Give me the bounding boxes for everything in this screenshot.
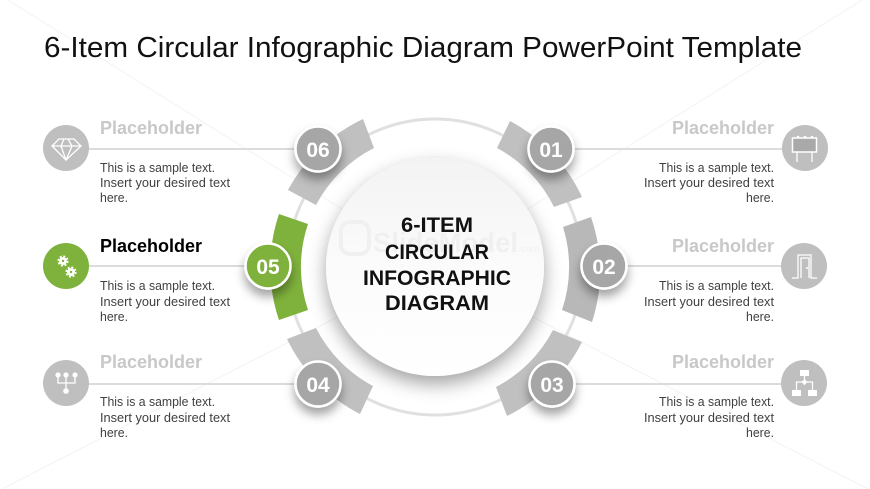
badge 01 [528,126,574,172]
icon: flow chart [781,360,827,406]
text block 06 [100,118,230,205]
badge 04: 04 [306,374,330,397]
text block 04: Insert your desired text [100,410,230,425]
text block 02 [644,236,774,324]
segment 04 [287,328,373,414]
badge 02 [582,244,626,288]
badge 02: 02 [592,256,616,279]
icon: door [781,243,827,289]
text block 03: Insert your desired text [644,410,774,425]
text block 04 [100,352,230,440]
badge 05: 05 [256,256,280,279]
text block 02: Insert your desired text [644,294,774,309]
centre text [363,214,511,315]
text block 03: This is a sample text. [659,394,774,409]
text block 02: This is a sample text. [659,278,774,293]
centre text: CIRCULAR [385,241,489,264]
badge 06 [296,126,340,172]
segment 01 [497,121,582,207]
text block 01: This is a sample text. [659,160,774,175]
title: 6-Item Circular Infographic Diagram PowerPoint Template [44,32,802,64]
text block 03: Placeholder [672,352,774,372]
text block 05: This is a sample text. [100,278,215,293]
badge 05 [246,244,290,288]
segment 03 [496,330,582,416]
badge 04 [296,362,340,406]
watermark: SlideModel [373,227,518,258]
watermark: .com [518,244,540,255]
icon: hierarchy [43,360,89,406]
text block 04: here. [100,425,128,440]
icon: diamond [43,125,89,171]
text block 04: Placeholder [100,352,202,372]
text block 06: here. [100,190,128,205]
segment 02 [562,217,600,322]
icon: gears [43,243,89,289]
text block 06: Insert your desired text [100,175,230,190]
centre text: INFOGRAPHIC [363,267,511,290]
centre text: DIAGRAM [385,292,489,315]
centre text: 6-ITEM [401,214,473,237]
badge 03 [530,362,574,406]
text block 05 [100,236,230,324]
text block 01 [644,118,774,205]
text block 05: Insert your desired text [100,294,230,309]
text block 01: here. [746,190,774,205]
segment 05 [270,214,308,320]
text block 03 [644,352,774,440]
text block 02: here. [746,309,774,324]
centre circle [326,158,544,376]
text block 05: Placeholder [100,236,202,256]
segment 06 [288,119,374,205]
connector lines [89,149,782,384]
text block 03: here. [746,425,774,440]
text block 06: This is a sample text. [100,160,215,175]
badge 06: 06 [306,139,330,162]
watermark [341,222,540,258]
text block 02: Placeholder [672,236,774,256]
text block 05: here. [100,309,128,324]
text block 01: Insert your desired text [644,175,774,190]
text block 04: This is a sample text. [100,394,215,409]
text block 01: Placeholder [672,118,774,138]
icon: billboard [782,125,828,171]
thin outer ring [287,119,583,415]
text block 06: Placeholder [100,118,202,138]
badge 03: 03 [540,374,564,397]
badge 01: 01 [539,139,563,162]
